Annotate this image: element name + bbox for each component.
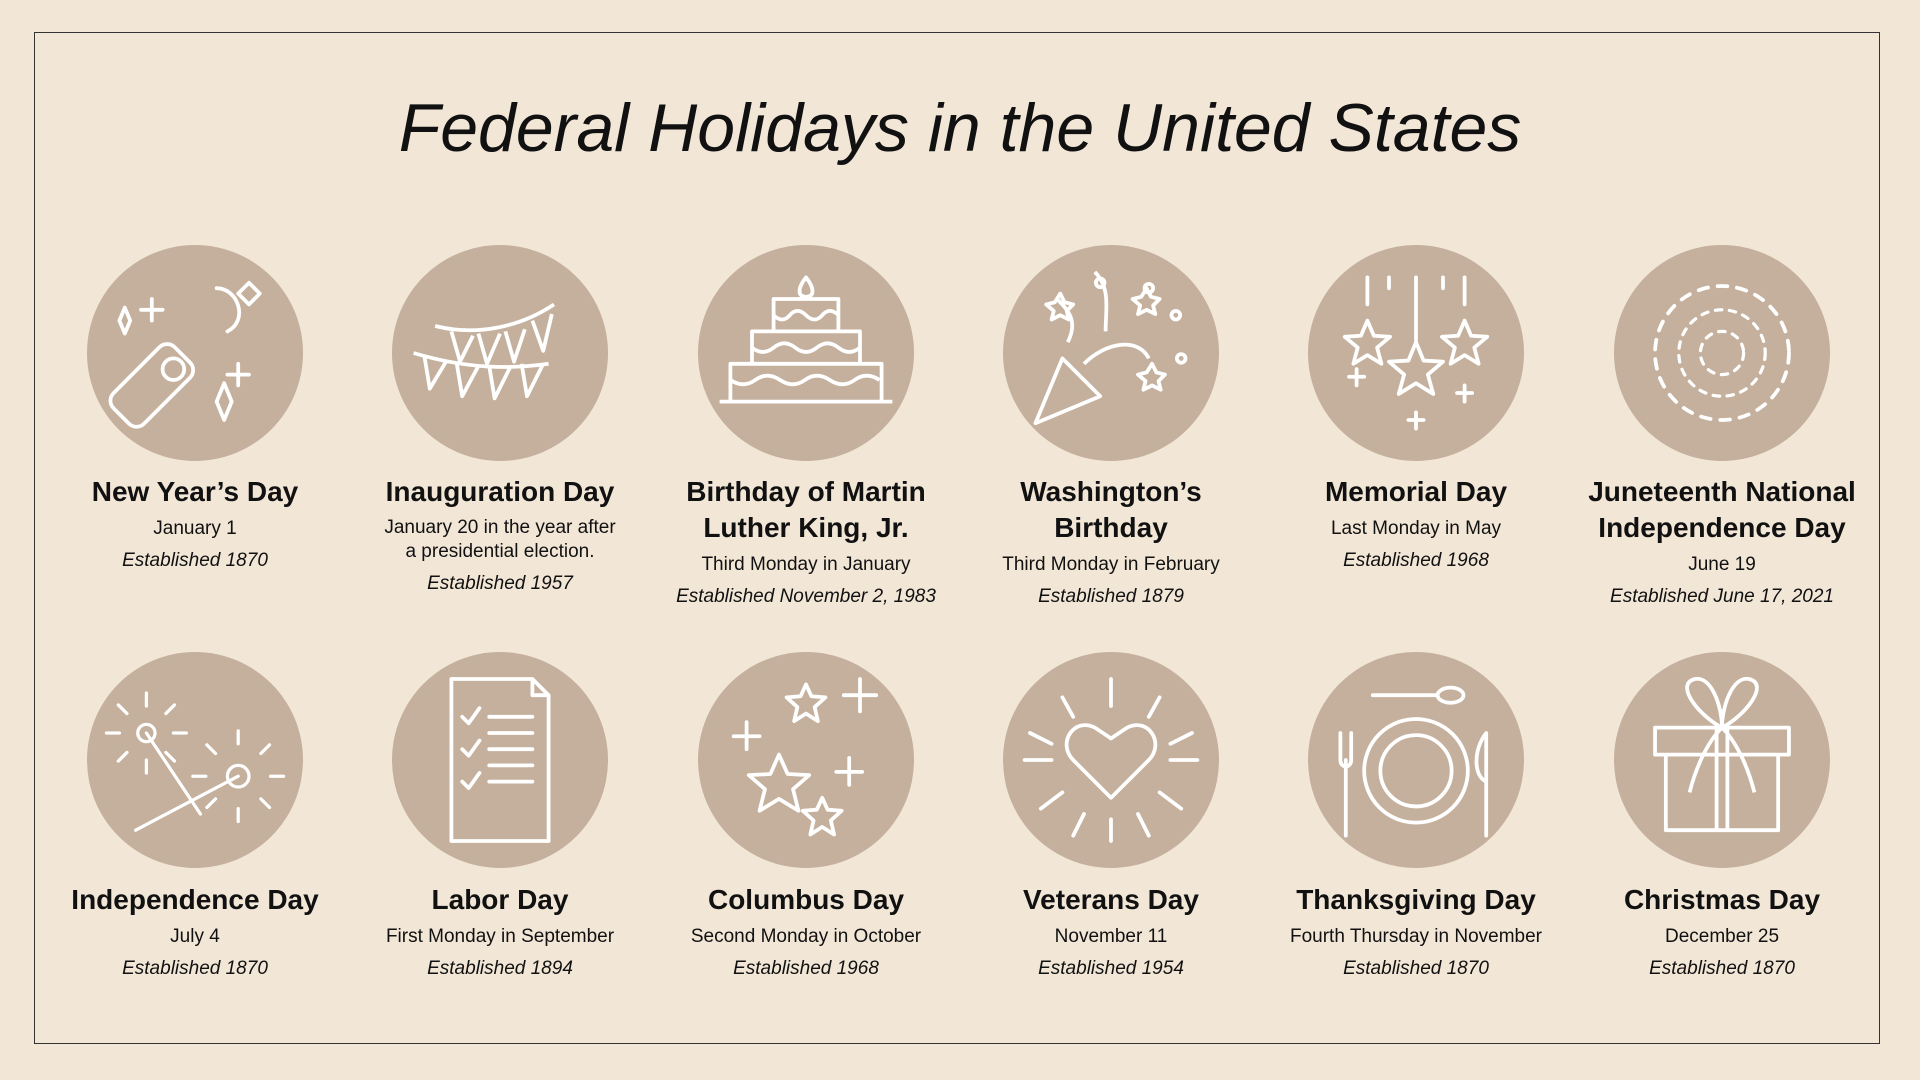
icon: fireworks: [1614, 245, 1830, 461]
text: Christmas: [1624, 884, 1820, 979]
icon: heart: [1003, 652, 1219, 868]
text: Thanksgiving: Fourth Thursday in November: [1290, 926, 1542, 947]
icon: stars: [1308, 245, 1524, 461]
text: Columbus Day: Columbus Day: [708, 884, 904, 915]
text: Veterans Day: [1023, 884, 1199, 979]
text: Columbus Day: Second Monday in October: [691, 926, 921, 947]
icon: gift: [1614, 652, 1830, 868]
text: Memorial: [1325, 476, 1507, 571]
text: Inauguration Day: a presidential election.: [405, 541, 595, 562]
text: Juneteenth: [1588, 476, 1856, 607]
icon: checklist: [392, 652, 608, 868]
text: Independence Day: Independence Day: [71, 884, 319, 915]
text: MLK: Established November 2, 1983: [676, 586, 936, 607]
text: New Year's Day: [92, 476, 298, 571]
text: Washington: Established 1879: [1038, 586, 1184, 607]
text: Independence Day: [71, 884, 319, 979]
text: New Year's Day: New Year’s Day: [92, 476, 298, 507]
title: Federal Holidays in the United States: [399, 90, 1521, 166]
icon: cake: [698, 245, 914, 461]
text: Juneteenth: Juneteenth National: [1588, 476, 1856, 507]
icon: champagne: [87, 245, 303, 461]
text: Labor Day: First Monday in September: [386, 926, 614, 947]
text: Veterans Day: November 11: [1055, 926, 1167, 947]
icon: bunting: [392, 245, 608, 461]
text: Columbus Day: [691, 884, 921, 979]
text: Washington: [1002, 476, 1220, 607]
text: Thanksgiving: Established 1870: [1343, 958, 1489, 979]
text: Labor Day: [386, 884, 614, 979]
icon: sparklers: [87, 652, 303, 868]
text: Thanksgiving: Thanksgiving Day: [1296, 884, 1536, 915]
text: MLK: Third Monday in January: [701, 554, 911, 575]
text: Christmas: December 25: [1665, 926, 1779, 947]
text: Labor Day: Labor Day: [432, 884, 568, 915]
text: New Year's Day: January 1: [153, 518, 237, 539]
text: Christmas: Established 1870: [1649, 958, 1795, 979]
text: Christmas: Christmas Day: [1624, 884, 1820, 915]
icon: plate: [1308, 652, 1524, 868]
text: Washington: Third Monday in February: [1002, 554, 1220, 575]
text: Independence Day: Established 1870: [122, 958, 268, 979]
icon: party popper: [1003, 245, 1219, 461]
text: Thanksgiving: [1290, 884, 1542, 979]
icon: stars 2: [698, 652, 914, 868]
text: Inauguration Day: Inauguration Day: [386, 476, 614, 507]
text: New Year's Day: Established 1870: [122, 550, 268, 571]
text: Veterans Day: Established 1954: [1038, 958, 1184, 979]
text: Washington: Birthday: [1054, 512, 1168, 543]
text: Juneteenth: June 19: [1688, 554, 1756, 575]
text: Labor Day: Established 1894: [427, 958, 573, 979]
text: Memorial: Memorial Day: [1325, 476, 1507, 507]
text: Inauguration Day: Established 1957: [427, 573, 573, 594]
text: Memorial: Last Monday in May: [1331, 518, 1501, 539]
text: Juneteenth: Independence Day: [1598, 512, 1846, 543]
text: Washington: Washington’s: [1020, 476, 1202, 507]
text: MLK: Luther King, Jr.: [703, 512, 909, 543]
text: Memorial: Established 1968: [1343, 550, 1489, 571]
text: Juneteenth: Established June 17, 2021: [1610, 586, 1834, 607]
text: Inauguration Day: [384, 476, 616, 594]
text: Inauguration Day: January 20 in the year after: [384, 517, 616, 538]
text: MLK: Birthday of Martin: [686, 476, 926, 507]
text: Veterans Day: Veterans Day: [1023, 884, 1199, 915]
text: Columbus Day: Established 1968: [733, 958, 879, 979]
text: MLK: [676, 476, 936, 607]
text: Independence Day: July 4: [170, 926, 220, 947]
